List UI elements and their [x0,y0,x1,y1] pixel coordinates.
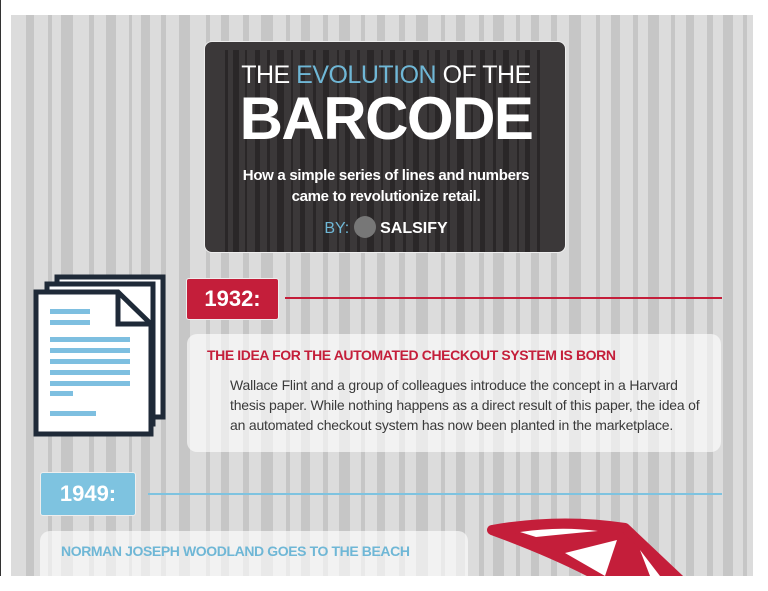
badge: 1949: 1949: [60,481,116,506]
subtitle [243,167,529,205]
body 1932: thesis paper. While nothing happens as a direct result of this paper, the idea of [230,397,699,413]
subtitle: came to revolutionize retail. [292,188,480,205]
body 1932: Wallace Flint and a group of colleagues introduce the concept in a Harvard [230,377,678,393]
byline: BY: SALSIFY [324,220,448,237]
heading 1949: NORMAN JOSEPH WOODLAND GOES TO THE BEACH [61,543,410,559]
body 1932: an automated checkout system has now been planted in the marketplace. [230,417,673,433]
icon: umbrella [487,518,683,576]
badge: 1949 [40,472,136,516]
badge: 1932: 1932: [204,286,261,311]
heading 1932: THE IDEA FOR THE AUTOMATED CHECKOUT SYSTEM IS BORN [207,347,616,363]
title: BARCODE: BARCODE [240,85,532,152]
title line 1: THE EVOLUTION OF THE [241,61,531,89]
body 1932 [230,377,700,433]
title box [204,41,566,253]
card: 1949 [40,531,468,591]
card: 1932 [187,334,721,452]
icon: documents [34,274,166,436]
subtitle: How a simple series of lines and numbers [243,167,529,184]
badge: 1932 [186,278,279,320]
